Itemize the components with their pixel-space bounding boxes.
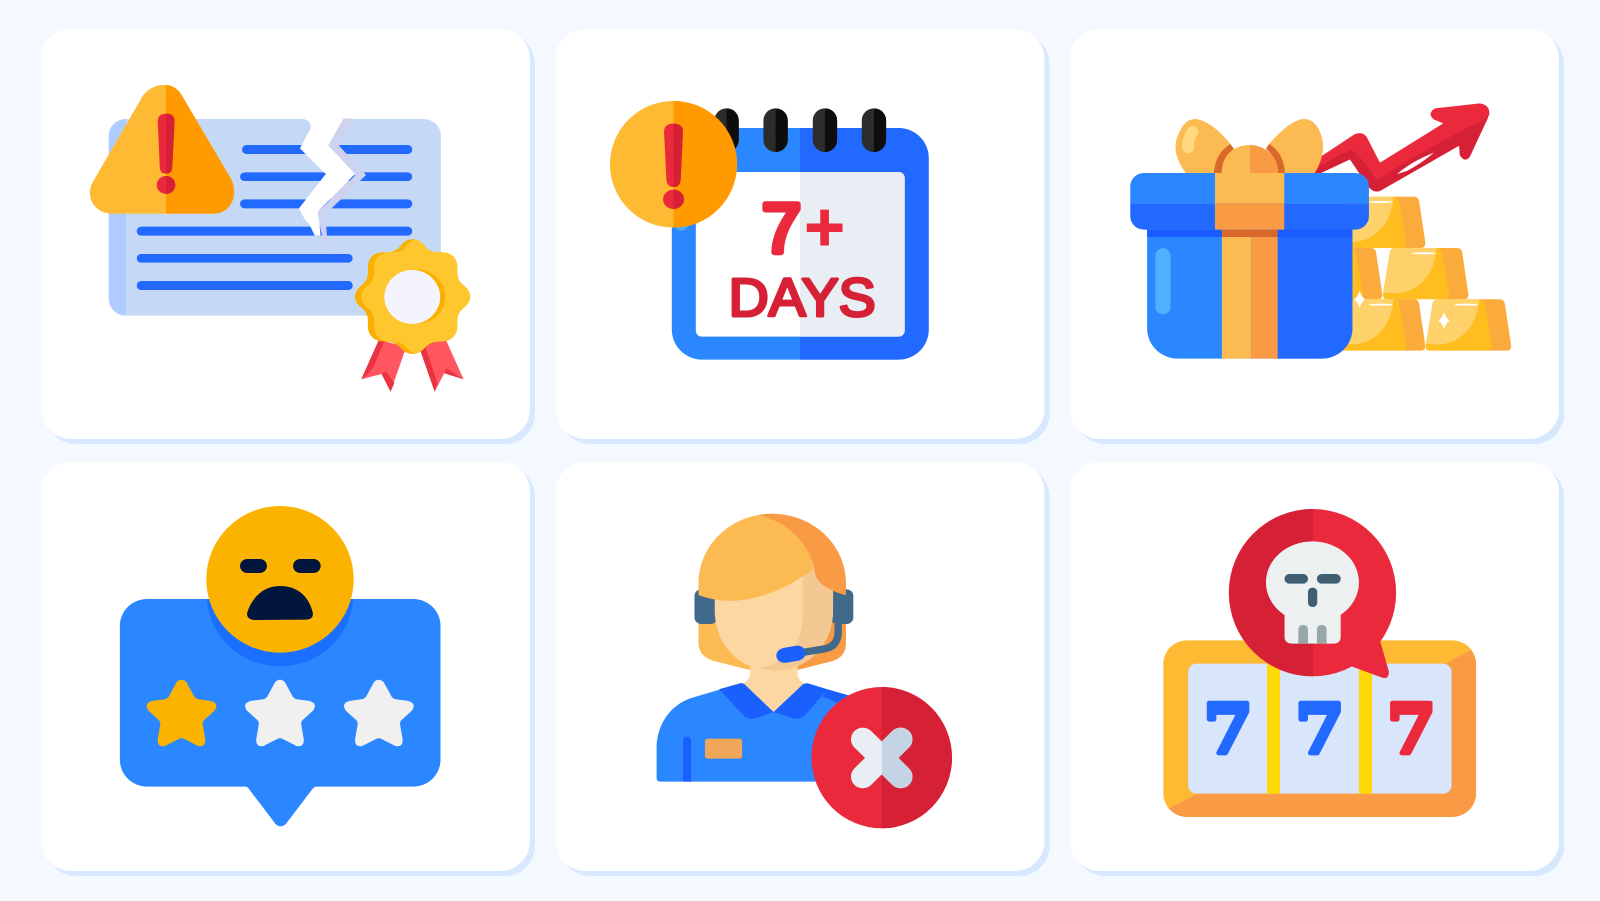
icon: rising arrow — [1301, 103, 1489, 191]
panel: customer support unavailable — [556, 462, 1050, 876]
icon: skull speech bubble — [1229, 509, 1396, 678]
agent collar — [719, 683, 827, 719]
panel: rigged slot machine — [1070, 462, 1564, 876]
agent face — [715, 560, 833, 671]
text: reel sevens: 7 — [1204, 690, 1253, 770]
icon: gold star — [147, 680, 216, 746]
face shadow — [207, 599, 353, 666]
headset ear cups — [694, 589, 853, 624]
headset microphone — [776, 624, 838, 663]
icon: ribbons of the rosette — [361, 340, 464, 392]
certificate document — [109, 119, 441, 316]
agent neck — [743, 665, 804, 712]
text: reel sevens: 7 — [1295, 690, 1344, 770]
icon: cracked certificate with warning triangle and rosette — [90, 85, 476, 392]
calendar binding rings — [714, 108, 886, 152]
panel: broken certificate warning — [41, 29, 535, 444]
text: reel sevens — [1204, 690, 1436, 770]
icon: warning triangle — [90, 85, 234, 214]
crack in the document — [299, 119, 366, 255]
calendar body — [672, 128, 929, 360]
icon: empty star — [245, 680, 315, 746]
icon: gift box body — [1147, 230, 1352, 359]
agent body — [657, 683, 849, 782]
speech bubble — [120, 599, 440, 826]
panel: one star review — [41, 462, 535, 876]
text: DAYS: DAYS — [729, 268, 876, 328]
icon: slot machine with skull bubble — [1163, 509, 1476, 817]
icon: empty star — [344, 680, 414, 746]
agent hair front — [699, 514, 846, 601]
text: 7+: + — [804, 189, 845, 266]
icon: rosette seal — [355, 239, 476, 354]
icon: calendar with alert — [610, 101, 929, 360]
text: reel sevens: 7 — [1387, 690, 1436, 770]
icon: support agent with cross — [657, 514, 952, 828]
text: 7+: 7 — [762, 188, 801, 267]
icon: red cross circle — [811, 687, 952, 828]
icon: alert circle — [610, 101, 737, 231]
icon: gift bow — [1176, 119, 1323, 173]
panel: seven plus days calendar — [556, 29, 1050, 444]
icon: gold bars — [1297, 197, 1511, 351]
icon: unhappy face over rating bubble — [120, 506, 440, 826]
panel: gift box with gold bars — [1070, 29, 1564, 444]
icon: unhappy face — [206, 506, 354, 653]
agent hair back — [699, 514, 846, 670]
slot machine frame — [1163, 640, 1476, 817]
icon: gift box lid — [1130, 173, 1369, 230]
icon: gift, gold and rising arrow — [1130, 103, 1511, 359]
